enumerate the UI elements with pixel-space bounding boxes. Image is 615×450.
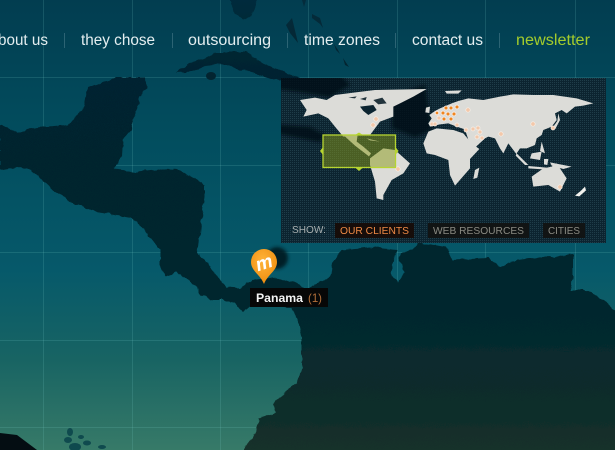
landmass: South America <box>240 243 615 450</box>
tooltip: Panama: Panama <box>256 291 303 305</box>
minimap: Japan <box>552 113 560 129</box>
minimap: South America <box>370 148 410 200</box>
minimap: Old World <box>423 90 593 196</box>
landmass: Mexico and Central America <box>0 78 318 312</box>
shadows of land behind panel <box>281 78 433 143</box>
landmass: Jamaica <box>206 72 216 80</box>
minimap: Mexico <box>343 135 371 156</box>
navigation bar <box>0 32 590 49</box>
minimap: Australia <box>532 163 567 192</box>
filter button: web resources: WEB RESOURCES <box>433 226 524 237</box>
landmass: Pacific corner <box>0 433 37 450</box>
panel: world minimap <box>270 74 606 243</box>
nav: time zones: time zones <box>304 32 380 49</box>
tooltip: Panama <box>250 288 328 307</box>
filter button: web resources <box>428 223 529 238</box>
nav: outsourcing: outsourcing <box>188 32 271 49</box>
tooltip: Panama: (1) <box>308 291 322 305</box>
landmass: Cuba <box>177 52 300 81</box>
minimap: Philippines <box>540 142 545 153</box>
minimap: orange client dots <box>436 106 458 120</box>
minimap: North America and Greenland <box>300 89 427 137</box>
nav: they chose: they chose <box>81 32 155 49</box>
filter button: our clients <box>335 223 414 238</box>
minimap: Hudson Bay <box>360 105 377 115</box>
landmass: Bahamas <box>286 0 349 67</box>
minimap: selection rectangle <box>320 132 398 171</box>
islands: bottom left <box>64 428 106 450</box>
filter label: show: SHOW: <box>292 225 326 236</box>
filter button: cities: CITIES <box>548 226 580 237</box>
nav: newsletter: newsletter <box>516 32 590 49</box>
minimap: Eurasia <box>428 94 593 160</box>
minimap: Madagascar <box>473 168 479 179</box>
filter button: our clients: OUR CLIENTS <box>340 226 409 237</box>
minimap: Indonesia <box>516 152 572 170</box>
minimap: Africa <box>423 128 479 186</box>
map pin: Panama: m <box>253 251 276 276</box>
minimap: Americas <box>300 89 427 200</box>
minimap: Cuba <box>367 138 380 142</box>
nav: contact us: contact us <box>412 32 483 49</box>
minimap: New Zealand <box>575 187 586 196</box>
minimap: Arctic channels <box>348 96 387 104</box>
minimap: client markers <box>371 105 562 189</box>
minimap: Britain and Iceland <box>425 90 462 113</box>
filter button: cities <box>543 223 585 238</box>
landmass: Florida <box>228 0 258 20</box>
map pin: Panama <box>251 247 288 284</box>
